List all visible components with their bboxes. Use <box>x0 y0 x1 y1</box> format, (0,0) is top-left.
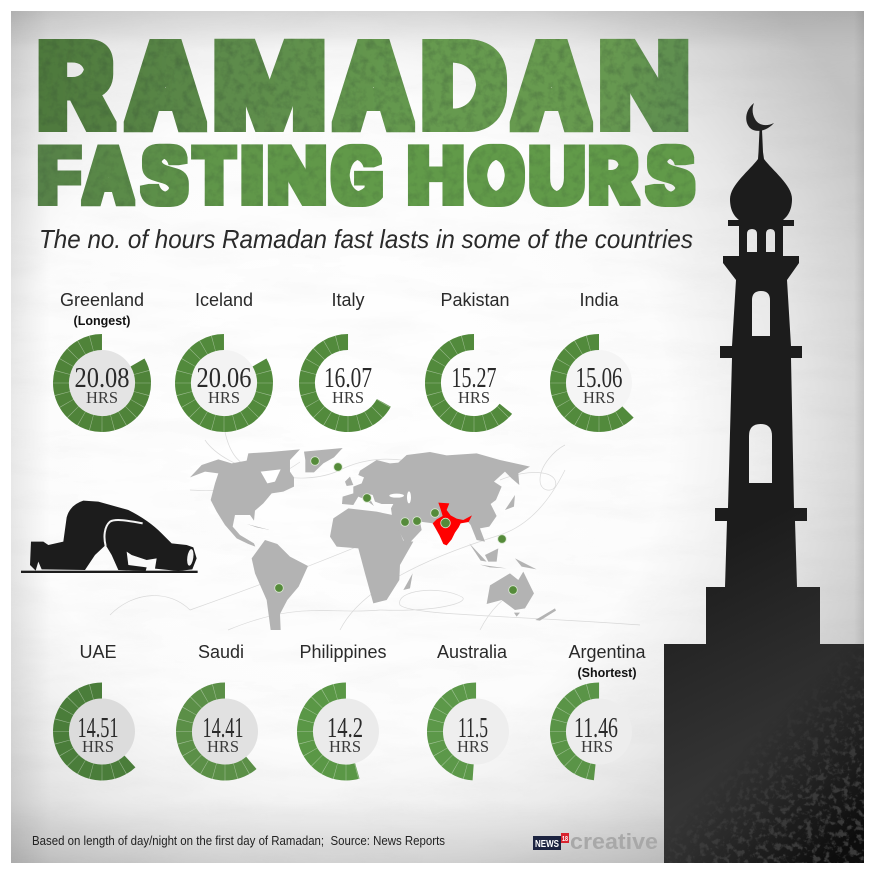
decorative map lines <box>110 432 640 630</box>
title: S <box>648 131 693 221</box>
icon: praying man <box>21 501 198 573</box>
donut: India: 15.06 <box>576 363 622 394</box>
title: I <box>241 131 263 221</box>
donut: Argentina <box>554 642 647 777</box>
donut: Saudi <box>167 642 283 789</box>
donut: Italy: HRS <box>332 388 364 407</box>
donut: UAE: 14.51 <box>78 713 118 744</box>
donut: Argentina: 11.46 <box>574 713 618 744</box>
title: A <box>84 131 132 221</box>
title: H <box>408 131 464 221</box>
title: N <box>267 131 327 221</box>
donut: Italy <box>292 290 404 439</box>
donut: Argentina: (Shortest) <box>577 666 637 680</box>
map landmasses <box>190 448 556 630</box>
title: R <box>590 131 637 221</box>
donut: Australia: HRS <box>457 737 489 756</box>
title: N <box>599 17 690 153</box>
donut: Iceland <box>168 290 280 439</box>
donut: Philippines: HRS <box>329 737 361 756</box>
donut: Pakistan: Pakistan <box>440 290 510 310</box>
donut: Iceland: Iceland <box>195 290 253 310</box>
icon: minaret <box>664 103 864 863</box>
title: S <box>143 131 186 221</box>
donut: Philippines: Philippines <box>299 642 387 662</box>
donut: Australia <box>432 642 520 775</box>
title: T <box>195 131 233 221</box>
title: M <box>212 17 327 153</box>
donut: Saudi: HRS <box>207 737 239 756</box>
map location dots <box>275 457 517 594</box>
donut: Iceland: HRS <box>208 388 240 407</box>
donut: Greenland: (Longest) <box>74 314 130 328</box>
title: F <box>38 131 79 221</box>
donut: Saudi: Saudi <box>198 642 244 662</box>
subtitle: The no. of hours Ramadan fast lasts in some of the countries <box>39 224 693 254</box>
donut: India <box>541 290 657 441</box>
title <box>38 17 693 221</box>
logo: News18 creative: creative <box>570 829 658 854</box>
donut: Philippines <box>295 642 397 782</box>
donut: Argentina: HRS <box>581 737 613 756</box>
donut: Greenland: 20.08 <box>74 363 130 394</box>
donut: Saudi: 14.41 <box>202 713 244 744</box>
donut: Pakistan <box>416 290 532 441</box>
title: A <box>336 17 411 153</box>
donut: Pakistan: 15.27 <box>452 363 496 394</box>
donut: Iceland: 20.06 <box>196 363 252 394</box>
footnote: Based on length of day/night on the first day of Ramadan; Source: News Reports <box>32 833 445 848</box>
donut: UAE: HRS <box>82 737 114 756</box>
donut: Italy: 16.07 <box>324 363 372 394</box>
title: G <box>333 131 382 221</box>
donut: Greenland: Greenland <box>60 290 144 310</box>
title: A <box>514 17 589 153</box>
donut: Greenland: HRS <box>86 388 118 407</box>
donut: Australia: Australia <box>437 642 508 662</box>
logo: News18 creative <box>533 829 658 854</box>
India highlighted <box>433 503 472 545</box>
minaret tower <box>664 130 864 863</box>
title: R <box>39 17 112 153</box>
crescent <box>746 103 774 131</box>
donut: Italy: Italy <box>331 290 365 310</box>
donut: Argentina: Argentina <box>568 642 647 662</box>
logo: News18 creative: NEWS <box>535 839 559 850</box>
donut: Greenland <box>46 290 158 439</box>
title: A <box>128 17 203 153</box>
title: U <box>530 131 584 221</box>
donut: India: HRS <box>583 388 615 407</box>
donut: Philippines: 14.2 <box>327 713 363 744</box>
donut: Pakistan: HRS <box>458 388 490 407</box>
donut: Australia: 11.5 <box>458 713 488 744</box>
base grunge <box>664 670 864 863</box>
donut: India: India <box>579 290 619 310</box>
title: D <box>422 17 505 153</box>
logo: News18 creative: 18 <box>562 834 568 843</box>
donut: UAE: UAE <box>79 642 117 662</box>
map inland seas <box>261 469 411 503</box>
donut: UAE <box>44 642 160 789</box>
title: O <box>469 131 523 221</box>
world map <box>190 448 556 630</box>
